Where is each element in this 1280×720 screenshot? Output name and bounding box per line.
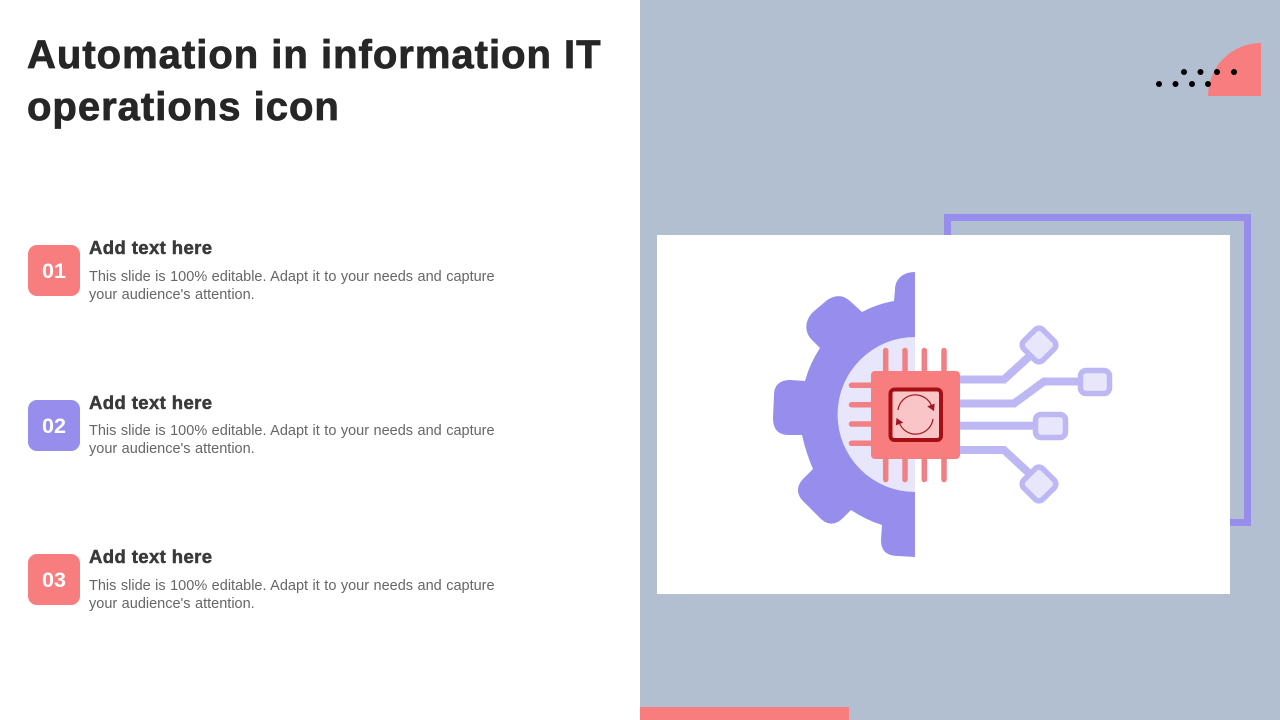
heading 01: Add text here: [89, 237, 212, 258]
bottom accent bar: [640, 707, 849, 720]
badge 02: 02: [42, 414, 66, 438]
body text 03: [89, 578, 495, 612]
heading 02: Add text here: [89, 392, 212, 413]
dot pattern: [1156, 69, 1237, 87]
badge 01: 01: [42, 259, 66, 283]
half gear: [773, 272, 915, 557]
list item 03: [28, 546, 495, 612]
body text 01: [89, 269, 495, 303]
body text 01: This slide is 100% editable. Adapt it to your needs and capture: [89, 269, 495, 285]
body text 01: your audience's attention.: [89, 287, 255, 303]
chip body: [871, 371, 960, 459]
purple frame: [948, 218, 1248, 522]
body text 03: your audience's attention.: [89, 596, 255, 612]
badge 02: [28, 400, 80, 451]
badge 01: [28, 245, 80, 296]
chip core: [890, 390, 941, 440]
list item 02: [28, 392, 495, 457]
badge 03: [28, 554, 80, 605]
inner half circle: [838, 337, 915, 492]
body text 02: [89, 423, 495, 457]
body text 02: your audience's attention.: [89, 441, 255, 457]
title: operations icon: [27, 85, 340, 129]
panel background: [640, 0, 1280, 720]
title: Automation in information IT: [27, 33, 602, 77]
heading 03: Add text here: [89, 546, 212, 567]
body text 03: This slide is 100% editable. Adapt it to your needs and capture: [89, 578, 495, 594]
chip pins: [852, 350, 944, 480]
icon: automation gear chip: [773, 272, 1110, 557]
circuit traces: [958, 354, 1082, 476]
badge 03: 03: [42, 568, 66, 592]
body text 02: This slide is 100% editable. Adapt it to your needs and capture: [89, 423, 495, 439]
icon: sync arrows: [896, 395, 934, 434]
list item 01: [28, 237, 495, 303]
circuit nodes: [1020, 326, 1110, 503]
right illustration panel: [640, 0, 1280, 720]
title: [27, 33, 602, 129]
quarter circle accent: [1208, 43, 1261, 96]
white card: [657, 235, 1230, 594]
